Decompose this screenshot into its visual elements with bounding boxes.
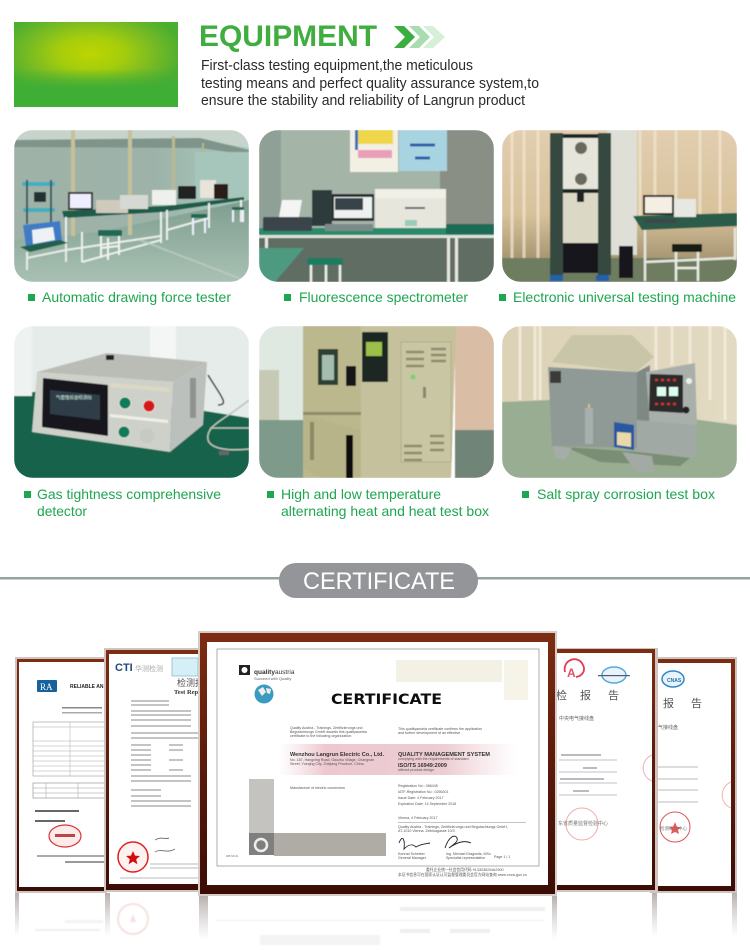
certificate: right report bbox=[555, 648, 658, 892]
certificate: quality austria main: Expiration Date: 14 September 2018 bbox=[398, 802, 456, 806]
photo: electronic universal testing machine bbox=[502, 130, 737, 282]
photo: gas tightness comprehensive detector: 气密性综合检测仪 bbox=[56, 394, 92, 401]
caption: high and low temperature alternating heat test box: alternating heat and heat test box bbox=[281, 503, 489, 519]
certificate: far right report: 气接线盘 bbox=[658, 724, 678, 731]
certificate: RA report, far left: RELIABLE AN bbox=[70, 684, 104, 690]
certificate: CTI test report bbox=[104, 648, 204, 892]
certificate: quality austria main: and further development of an effective bbox=[398, 731, 460, 735]
intro text block bbox=[201, 58, 539, 109]
certificate: quality austria main: Manufacture of electric connectors bbox=[290, 786, 345, 790]
certificate: quality austria main: without product design bbox=[398, 768, 434, 772]
certificate: far right report: 报 bbox=[663, 696, 674, 710]
caption: fluorescence spectrometer: Fluorescence spectrometer bbox=[299, 289, 468, 305]
heading pill: certificate bbox=[279, 563, 478, 598]
heading pill: certificate: CERTIFICATE bbox=[303, 568, 455, 595]
certificate: quality austria main: No. 187, Hangxing Road, Gaozhu Village, Changnan bbox=[290, 758, 374, 762]
certificate: right report: 报 bbox=[580, 688, 591, 702]
certificate: quality austria main: Quality Austria - Trainings, Zertifizierungs und bbox=[290, 726, 363, 730]
certificate title: CERTIFICATE bbox=[331, 692, 442, 708]
certificate: right report: 中央电气接线盘 bbox=[559, 715, 594, 722]
logo: quality austria: Succeed with Quality bbox=[254, 676, 291, 681]
heading: equipment: EQUIPMENT bbox=[199, 20, 377, 53]
certificate: quality austria main: 委托企业统一社会信用代码 91330382MA2900 bbox=[426, 867, 504, 872]
certificate: RA report, far left: RA bbox=[40, 682, 53, 692]
caption: salt spray corrosion test box: Salt spray corrosion test box bbox=[537, 486, 715, 502]
certificate: CTI test report: 华测检测 bbox=[135, 664, 163, 673]
certificate: quality austria main: AT-1010 Vienna, Zelinkagasse 10/3 bbox=[398, 829, 455, 833]
certificate: quality austria main: Page 1 / 1 bbox=[494, 855, 510, 859]
logo: quality austria bbox=[239, 665, 295, 681]
certificate: CTI test report: 检测报 bbox=[177, 677, 204, 688]
certificate: quality austria main bbox=[198, 631, 557, 896]
certificate: quality austria main: complying with the requirements of standard bbox=[398, 757, 469, 761]
certificate: right report: 东省质量监督检验中心 bbox=[558, 820, 608, 827]
photo: automatic drawing force tester bbox=[14, 130, 249, 282]
intro text block: First-class testing equipment,the meticulous bbox=[201, 58, 473, 74]
certificate: quality austria main: Quality Austria - Trainings, Zertifizierungs und Begutachtungs GmbH, bbox=[398, 825, 508, 829]
photo: salt spray corrosion test box bbox=[502, 326, 737, 478]
certificate: quality austria main: IATF-Registration No.: 0256301 bbox=[398, 790, 448, 794]
photo: high and low temperature test box bbox=[259, 326, 494, 478]
caption: gas tightness comprehensive detector: detector bbox=[37, 503, 87, 519]
photo: gas tightness comprehensive detector bbox=[14, 326, 249, 478]
photo: fluorescence spectrometer bbox=[259, 130, 494, 282]
caption: gas tightness comprehensive detector: Gas tightness comprehensive bbox=[37, 486, 221, 502]
green gradient block bbox=[14, 22, 178, 107]
certificate reflections bbox=[15, 893, 737, 945]
certificate: CTI test report: Test Rep bbox=[174, 689, 199, 696]
certificate: far right report bbox=[650, 657, 737, 893]
certificate: RA report, far left bbox=[15, 657, 107, 893]
certificate: quality austria main: Issue Date: 4 February 2017 bbox=[398, 796, 444, 800]
certificate: quality austria main: IMS NO.21 bbox=[226, 855, 239, 858]
icon: globe seal bbox=[254, 684, 274, 704]
caption: high and low temperature alternating heat test box: High and low temperature bbox=[281, 486, 441, 502]
certificate: right report: A bbox=[567, 666, 576, 680]
certificate: quality austria main: Wenzhou Langrun Electric Co., Ltd. bbox=[290, 752, 385, 758]
certificate: far right report: CNAS bbox=[667, 678, 682, 684]
certificate: quality austria main: General Manager bbox=[398, 856, 427, 860]
certificate: far right report: 告 bbox=[691, 697, 702, 710]
certificate: quality austria main: Begutachtungs GmbH awards this qualityaustria bbox=[290, 730, 367, 734]
certificate: quality austria main: Konrad Scheiber bbox=[398, 852, 426, 856]
certificate: quality austria main: This qualityaustria certificate confirms the application bbox=[398, 727, 482, 731]
certificate: CTI test report: CTI bbox=[115, 662, 133, 674]
certificate: quality austria main: QUALITY MANAGEMENT SYSTEM bbox=[398, 752, 490, 758]
caption: electronic universal testing machine: Electronic universal testing machine bbox=[513, 289, 736, 305]
certificate: quality austria main: certificate to the following organization: bbox=[290, 734, 352, 738]
certificate: quality austria main: Ing. Michael Dragosits, MSc bbox=[446, 852, 491, 856]
certificate: quality austria main: Street, Yueqing City, Zhejiang Province, China bbox=[290, 762, 364, 766]
intro text block: ensure the stability and reliability of Langrun product bbox=[201, 93, 525, 109]
certificate: right report: 检 bbox=[556, 688, 567, 702]
icon: triple chevron arrows bbox=[394, 26, 445, 48]
certificate: quality austria main: Specialist representative bbox=[446, 856, 485, 860]
certificate: quality austria main: Vienna, 4 February 2017 bbox=[398, 816, 438, 820]
caption: high and low temperature alternating heat test box bbox=[267, 486, 489, 519]
logo: quality austria: qualityaustria bbox=[254, 669, 295, 676]
caption: gas tightness comprehensive detector bbox=[24, 486, 221, 519]
certificate: quality austria main: Registration No.: 066445 bbox=[398, 784, 438, 788]
intro text block: testing means and perfect quality assurance system,to bbox=[201, 76, 539, 92]
certificate: far right report: 检测研究中心 bbox=[660, 825, 687, 832]
certificate: quality austria main: 本证书信息可在国家认证认可监督管理委员会官方网站查询 www.cnca.gov.cn bbox=[398, 872, 527, 877]
caption: automatic drawing force tester: Automatic drawing force tester bbox=[42, 289, 231, 305]
certificate: quality austria main: ISO/TS 16949:2009 bbox=[398, 763, 447, 769]
certificate: right report: 告 bbox=[608, 689, 619, 702]
